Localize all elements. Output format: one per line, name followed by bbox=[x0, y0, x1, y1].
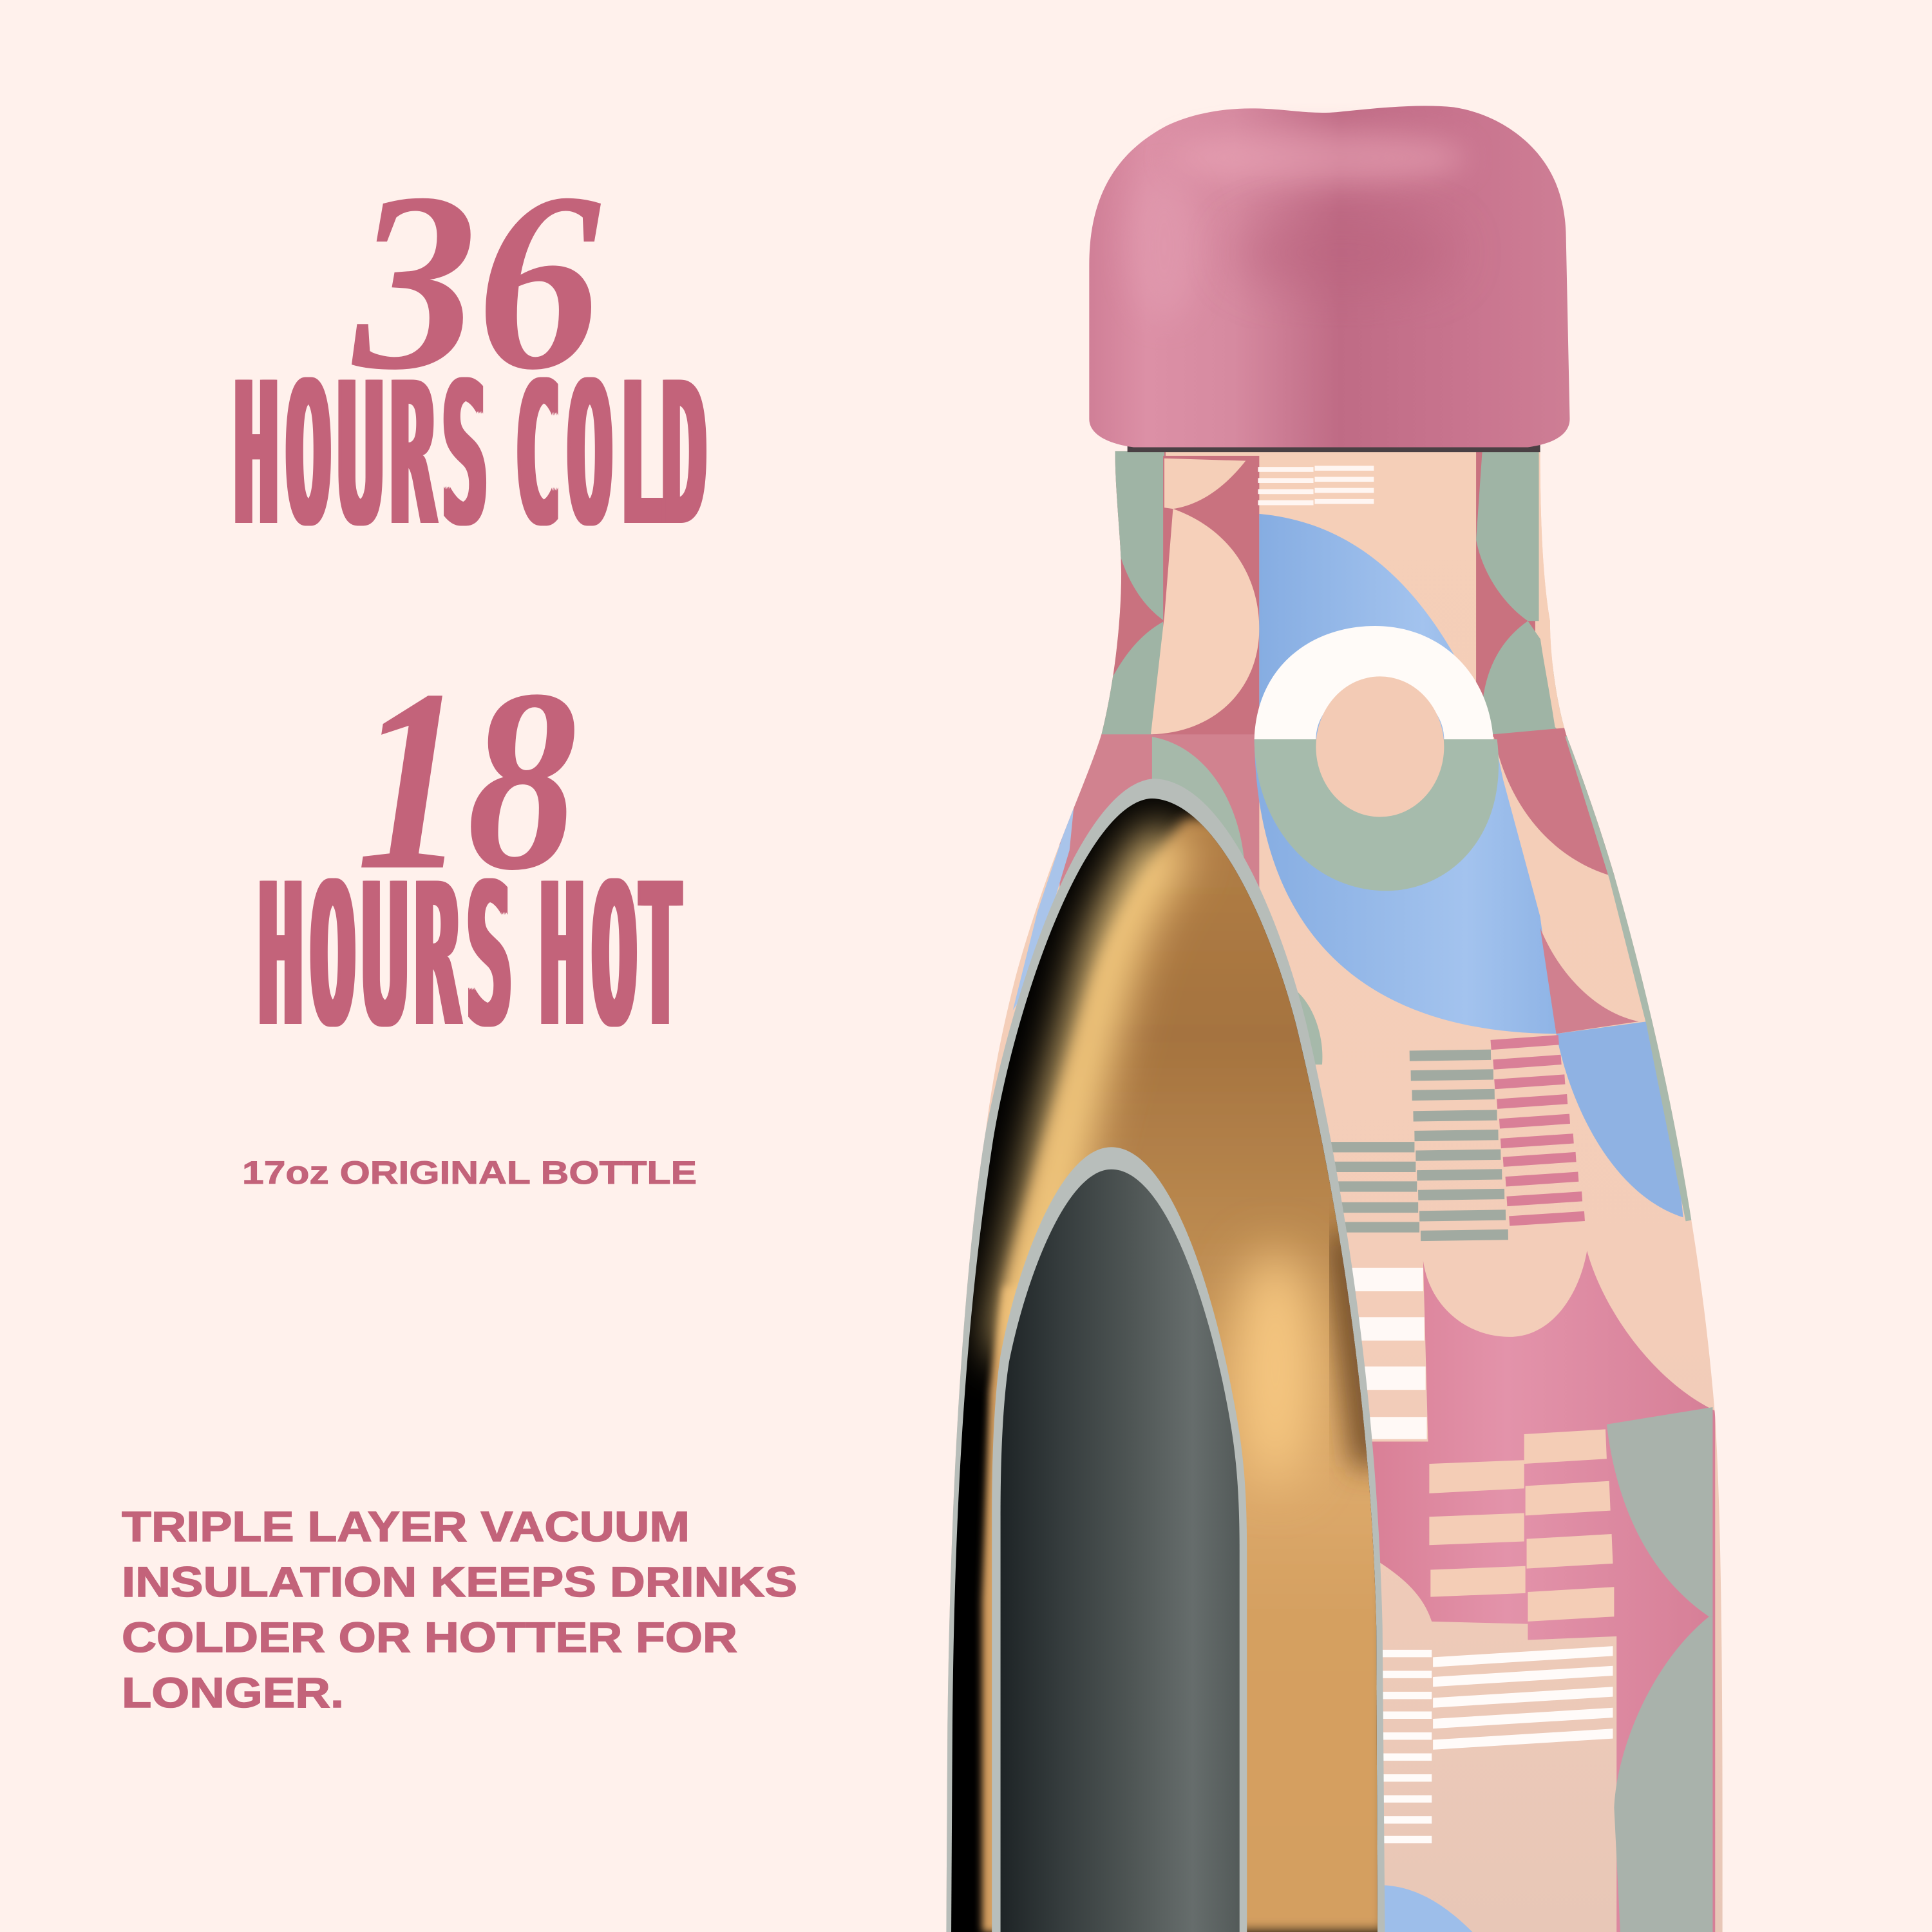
white stripes block left bbox=[1380, 1650, 1432, 1843]
number 18: 18 bbox=[356, 636, 578, 924]
grey arcs right bbox=[1607, 1407, 1712, 1932]
inner grey rim bbox=[992, 1147, 1247, 1932]
right edge sage strip bbox=[1572, 734, 1693, 1220]
copper highlight band bbox=[1018, 838, 1173, 1356]
white stripes block right bbox=[1433, 1646, 1613, 1750]
insulation description: INSULATION KEEPS DRINKS bbox=[122, 1558, 797, 1605]
heading: hours cold: HOURS COLD bbox=[233, 341, 713, 569]
neck left column bbox=[1101, 451, 1166, 737]
copper lower strip bbox=[982, 1286, 1035, 1932]
cutaway grey outer rim bbox=[946, 779, 1385, 1932]
blue lobe at bottom bbox=[1380, 1885, 1472, 1932]
insulation description: LONGER. bbox=[122, 1669, 344, 1716]
neck second column bbox=[1151, 456, 1259, 737]
right neck column bbox=[1476, 451, 1567, 739]
lower left shoulder panel bbox=[1013, 734, 1259, 1010]
cap seam bbox=[1128, 441, 1540, 452]
rose panel bbox=[1368, 1251, 1715, 1932]
right blue lobe bbox=[1556, 1021, 1683, 1217]
blue arcs bbox=[1255, 514, 1556, 1034]
insulation description: TRIPLE LAYER VACUUM bbox=[122, 1502, 690, 1550]
insulation description: COLDER OR HOTTER FOR bbox=[122, 1613, 737, 1661]
grey stripes bbox=[1325, 1055, 1508, 1236]
cap shadow dimple bbox=[1232, 218, 1454, 287]
sage bump bbox=[1298, 992, 1323, 1065]
neck mini stripes bbox=[1258, 466, 1374, 505]
cap top highlight bbox=[1171, 131, 1466, 185]
heading: hours hot: HOURS HOT bbox=[258, 842, 690, 1070]
peach bars on rose bbox=[1429, 1429, 1614, 1622]
cutaway cavity with copper layer bbox=[943, 788, 1392, 1932]
bottle cap bbox=[1089, 106, 1570, 448]
cap left glow bbox=[1130, 173, 1199, 320]
inner liner dark bbox=[1001, 1170, 1240, 1932]
size label: 17oz ORIGINAL BOTTLE bbox=[242, 1155, 697, 1191]
ring motif bbox=[1255, 626, 1499, 891]
copper lower glow bbox=[1231, 1251, 1320, 1484]
bottle body with geometric pattern bbox=[936, 444, 1738, 1932]
bottle illustration bbox=[946, 106, 1723, 1932]
copper wall bbox=[998, 813, 1386, 1932]
white stripes beside the cut bbox=[1349, 1268, 1427, 1439]
pink stripes bbox=[1491, 1040, 1584, 1221]
number 36: 36 bbox=[350, 140, 601, 422]
insulation description bbox=[122, 1502, 797, 1716]
copper right shade bbox=[1343, 1232, 1370, 1466]
right shoulder rose shapes bbox=[1493, 727, 1639, 1034]
